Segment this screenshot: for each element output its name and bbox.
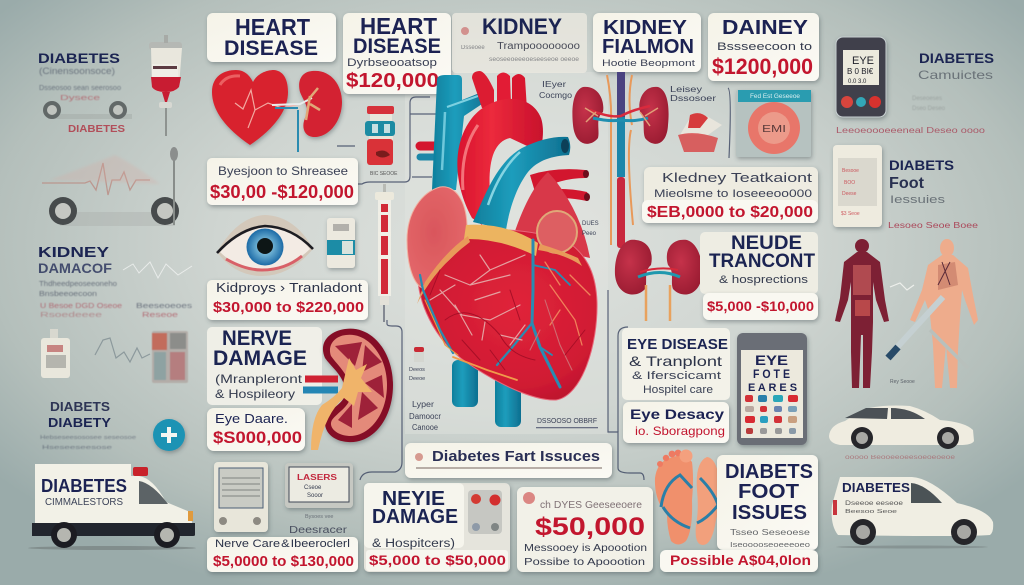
panel: kidney faded: KIDNEY: [482, 14, 562, 39]
icon: white sedan: [829, 406, 974, 449]
caption: liver lower: Damoocr: [409, 412, 441, 421]
caption: liver center top: IEyer: [542, 80, 566, 89]
panel: kidney failure: FIALMON: [602, 36, 694, 58]
sclera: [220, 226, 310, 270]
left: kidney damage block: DAMACOF: [38, 260, 112, 276]
ecg line: [42, 163, 150, 195]
superior vena cava: [432, 75, 489, 190]
panel: neude transcont: [700, 232, 818, 294]
panel: kidney transplant cost: $30,000 to $220,000: [213, 299, 364, 316]
right: diabets foot block: [888, 157, 979, 230]
icon: phone with report: Besooe: [842, 168, 859, 174]
icon: white van: Beesoo Seoe: [845, 509, 897, 515]
eyelid: [217, 215, 313, 276]
caption: small vial: [409, 367, 425, 382]
caption lines: Dysece: [60, 95, 100, 102]
panel: diabets foot issues: DIABETS: [725, 461, 813, 483]
app buttons: [745, 395, 798, 434]
ambulance light: [133, 467, 148, 476]
icon: white van: DIABETES: [842, 480, 910, 495]
icon: ghost car 1: [43, 101, 132, 119]
panel: kidney treatment: [642, 167, 818, 223]
ambulance text: DIABETES: [41, 476, 127, 496]
caption: below devices: [289, 514, 348, 536]
subtitle: complications: (Cinensoonsoce): [39, 66, 115, 76]
caption: figures: [890, 283, 915, 385]
icon: gadget with pink disc: Fed Est Geseeoe: [750, 94, 801, 100]
panel: kidney failure: Hootie Beopmont: [602, 58, 695, 69]
icon: eye: [217, 215, 313, 276]
panel: nerve damage: NERVE: [222, 327, 292, 350]
connector lines: [337, 88, 730, 480]
pupil: [257, 238, 273, 254]
right: diabets foot block: Foot: [889, 175, 925, 192]
panel: amputation cost: Messooey is Apoootion: [524, 543, 647, 554]
crack and vessels: [235, 90, 300, 128]
panel: light area behind heart: [405, 72, 608, 434]
right strap: [697, 478, 718, 523]
panel: amputation cost: $50,000: [535, 513, 645, 541]
caption: liver center top: [539, 80, 573, 100]
panel: heart disease title: DISEASE: [224, 37, 318, 60]
panel: nerve care cost: [207, 537, 358, 572]
caption: Hseseeseesose: [42, 445, 112, 451]
panel: kidney faded: seoseeoeeeoeseeseoe oeeoe: [489, 57, 580, 63]
ambulance body: [35, 464, 193, 534]
panel: eye disease card: & Tranplont: [629, 353, 722, 369]
ghost dashes: [912, 96, 946, 112]
icon: kidney cross-section: [303, 329, 393, 450]
kidney left: [572, 87, 603, 144]
panel: eye desacy pill: [623, 402, 729, 443]
panel: diabetes foot issues banner: Diabetes Fart Issuces: [432, 448, 600, 465]
probe: [173, 150, 175, 225]
artery and vein: [305, 376, 338, 382]
left strap: [661, 475, 692, 528]
panel: neyie damage: NEYIE: [382, 488, 445, 510]
left: diabets block: DIABETY: [48, 415, 111, 430]
panel: neyie damage: DAMAGE: [372, 506, 458, 528]
car wheels: [60, 212, 175, 226]
yellow fat band: [464, 225, 538, 256]
panel: diabets foot issues: FOOT: [738, 481, 799, 503]
icon: kidney pieces: [678, 113, 722, 152]
heading: kidney damage: KIDNEY: [38, 244, 109, 261]
icon: phone eye chart: [737, 333, 807, 445]
caption: liver lower: [409, 400, 441, 432]
panel: neude cost pill: $5,000 -$10,000: [707, 298, 814, 314]
panel: eye disease cost: Byesjoon to Shreasee: [218, 164, 348, 178]
panel: amputation cost: Possibe to Apoootion: [524, 557, 645, 568]
caption: small right: [582, 221, 599, 237]
main heart body: [418, 230, 597, 400]
icon: phone eye chart: E A R E S: [748, 382, 797, 394]
icon: gadget with pink disc: [736, 90, 811, 157]
icon: ambulance: [28, 464, 196, 550]
heading: DIABETS: [889, 157, 954, 173]
panel: dainey cost: [708, 13, 819, 81]
icon: lower kidneys: [615, 240, 702, 321]
panel: nerve damage: DAMAGE: [213, 347, 307, 370]
rule under caption: [536, 427, 598, 428]
medulla pyramids: [335, 342, 384, 428]
left foot: [655, 456, 693, 544]
ambulance window: [139, 481, 168, 504]
lashes: [217, 226, 313, 253]
panel: eye disease pill: Eye Daare.: [215, 411, 288, 426]
panel: eye desacy pill: io. Sboragpong: [635, 424, 725, 438]
left: diabets block: [40, 399, 136, 451]
panel: heart disease title: [207, 13, 336, 62]
iris: [246, 228, 284, 266]
panel: eye disease card: Hospitel care: [643, 384, 713, 396]
panel: eye disease card: [622, 328, 730, 400]
panel: eye disease cost: $30,00 -$120,000: [210, 182, 354, 202]
caption lines: Dsseosoo sean seerosoo: [39, 85, 121, 92]
panel: kidney faded: Dsseoee: [461, 45, 485, 51]
caption: liver center top: Cocmgo: [539, 91, 573, 100]
panel: diabets foot issues: Tsseo Seseoese: [730, 528, 811, 537]
right upper heart back: [512, 172, 590, 258]
red caption: Lesoeo Seoe Boee: [888, 221, 979, 230]
panel: neyie damage: $5,000 to $50,000: [369, 552, 506, 568]
icon: orange body figure: [910, 239, 978, 388]
panel: heart disease cost: $120,000: [346, 70, 439, 92]
panel: heart disease cost: Dyrbseooatsop: [347, 57, 437, 69]
icon: injection pen: [888, 297, 968, 368]
highlight: [220, 76, 240, 85]
ambulance stripe: [32, 523, 195, 536]
panel: dainey cost: Bssseecoon to: [717, 41, 812, 53]
panel: kidney transplant cost: [207, 280, 368, 320]
ambulance wheels: [51, 522, 77, 548]
caption: leader text: Leisey: [670, 85, 702, 94]
icon: monitor device: [214, 462, 268, 532]
kidney shape: [299, 71, 342, 137]
icon: glucose meter: 0.0 3.0: [848, 79, 867, 85]
caption: sedan: ooooo Beooeeoeesoeoeoeoe: [845, 455, 956, 461]
red caption: Leeoeoooeeeneal Deseo oooo: [836, 126, 986, 135]
caption: Reseoe: [142, 312, 178, 319]
icon: red anatomy figure: [835, 239, 889, 388]
panel: diabets foot issues: [717, 455, 818, 550]
left atrium pink: [407, 187, 467, 288]
icon: small vial: [414, 347, 424, 362]
panel: eye disease card: EYE DISEASE: [627, 336, 728, 353]
panel: kidney failure: [593, 13, 701, 72]
captions around heart: [409, 80, 599, 432]
pulmonary artery: [473, 137, 570, 230]
panel: kidney faded: Trampoooooooo: [497, 41, 580, 52]
bottle caption: BIC SEOOE: [370, 171, 398, 177]
renal pelvis and ureter: [311, 358, 372, 450]
icon: phone with report: BOO: [844, 180, 855, 186]
panel: nerve care cost: $5,0000 to $130,000: [213, 553, 354, 570]
caption: Rsoedeeee: [40, 312, 102, 319]
icon: white van: Dseeoe eeseoe: [845, 501, 904, 507]
panel: eye desacy pill: Eye Desacy: [630, 406, 724, 422]
icon: glucose meter: [836, 37, 886, 117]
caption: small vial: Deeoe: [409, 376, 425, 382]
right: diabetes text block: [836, 50, 994, 135]
panel: dainey cost: $1200,000: [712, 54, 813, 79]
panel: kidney treatment: $EB,0000 to $20,000: [647, 204, 813, 221]
caption: Thdheedpeoseeoneho: [39, 281, 117, 288]
icon: laser device: [285, 463, 353, 508]
caption: figures: Rey Seooe: [890, 379, 915, 385]
panel: neude transcont: NEUDE: [731, 233, 802, 254]
ambulance shadow: [28, 546, 196, 550]
caption: leader text: Dssosoer: [670, 94, 716, 103]
icon: phone with report: Deese: [842, 191, 857, 197]
icon: medical plus badge: [153, 419, 185, 451]
icon: phone with report: [833, 145, 882, 227]
heading: diabetes: DIABETES: [38, 50, 120, 66]
blue lower stumps: [452, 360, 478, 407]
outer kidney: [323, 329, 393, 442]
panel: amputation cost: ch DYES Geeseeoere: [540, 500, 642, 511]
renal vessels: [593, 118, 648, 121]
chart: faded ECG with car: [42, 147, 179, 226]
ghost dashes: Deseoeses: [912, 96, 942, 102]
caption: liver lower: Lyper: [412, 400, 434, 409]
panel: neyie damage: & Hospitcers): [372, 538, 455, 550]
icon: feet: [655, 450, 720, 545]
panel: kidney treatment: Kledney Teatkaiont: [662, 170, 813, 185]
caption: liver lower: Canooe: [412, 423, 439, 432]
right red vessels: [530, 169, 588, 192]
panel: possible amputation pill: [660, 550, 818, 572]
panel: dainey cost: DAINEY: [722, 17, 809, 39]
caption: small right: DUES: [582, 221, 599, 227]
ghost dashes: Dseo Deseo: [912, 106, 946, 112]
panel: eye disease pill: [207, 408, 305, 451]
caption: [40, 435, 136, 451]
panel: nerve damage: [207, 327, 322, 405]
icon: laser device: Cseoe: [304, 485, 322, 491]
caption: below devices: Deesracer: [289, 525, 348, 536]
caption: U Besoe DGD Oseoe: [40, 303, 122, 310]
panel: diabets foot issues: ISSUES: [732, 502, 807, 524]
right foot: [696, 457, 720, 545]
panel: heart disease cost: [343, 13, 451, 94]
panel: eye disease card: & Iferscicamt: [632, 370, 721, 382]
icon: phone eye chart: EYE: [755, 352, 788, 368]
subtitle: complications: Camuictes: [918, 68, 993, 82]
panel: eye disease cost: [207, 158, 358, 205]
icon: glucose meter: B 0 BI€: [847, 67, 874, 76]
icon: laser device: LASERS: [297, 473, 338, 482]
panel: nerve damage: & Hospileory: [215, 387, 295, 401]
panel: eye disease pill: $S000,000: [213, 428, 302, 447]
red label: diabetes: DIABETES: [68, 124, 125, 135]
caption: leader text: [670, 85, 716, 103]
panel: amputation cost: [517, 487, 653, 572]
caption: Beeseoeoes: [136, 303, 193, 310]
aorta stubs: [472, 71, 494, 108]
icon: phone with report: $3 Seoe: [841, 211, 860, 217]
panel: neude cost pill: [703, 293, 818, 320]
icon: ambulance: CIMMALESTORS: [45, 497, 123, 508]
icon: central vessel with upper kidneys: [572, 72, 669, 248]
ecg small: [123, 262, 192, 278]
inner cortex: [330, 335, 387, 436]
panel: kidney failure: KIDNEY: [603, 17, 688, 39]
panel: neude transcont: & hosprections: [719, 274, 809, 286]
caption: below devices: Bysoes vee: [305, 514, 333, 520]
icon: phone eye chart: F O T E: [753, 367, 790, 381]
left column: diabetes text: [38, 50, 125, 135]
panel: kidney treatment: Mieolsme to Ioseeeoo000: [654, 188, 812, 200]
heading: diabets: DIABETS: [50, 399, 110, 414]
icon: ghost equipment: [152, 331, 188, 383]
panel: heart disease cost: HEART: [360, 13, 437, 39]
right pink oval: [537, 211, 577, 253]
icon: syringe: [375, 184, 394, 322]
icon: white van: [832, 477, 993, 548]
panel: diabets foot issues: Iseooooseoeeeoeo: [730, 542, 810, 549]
panel: heart disease cost: DISEASE: [353, 35, 441, 58]
icon: pill bottle: [365, 106, 398, 177]
kidney right: [639, 87, 669, 144]
caption: small right: Peeo: [582, 231, 597, 237]
panel: diabetes foot issues banner: [405, 443, 612, 478]
buttons cluster: [468, 490, 502, 534]
left: kidney damage block: [38, 244, 193, 319]
caption: small vial: Deeos: [409, 367, 425, 373]
caption lines: [39, 85, 121, 102]
caption: [39, 281, 193, 319]
icon: small bottle: [327, 218, 355, 268]
icon: heart anatomy: [407, 71, 597, 427]
icon: broken heart with kidney: [212, 70, 342, 152]
panel: kidney faded: [452, 13, 587, 73]
panel: possible amputation pill: Possible A$04,0lon: [670, 552, 811, 568]
panel: kidney transplant cost: Kidproys › Tranladont: [216, 280, 362, 295]
central vessels: [617, 72, 625, 117]
panel: neyie damage: [364, 483, 510, 572]
caption: Hebseseesososee seseosoe: [40, 435, 136, 441]
heart shape: [212, 70, 288, 145]
icon: laser device: Sooor: [307, 493, 323, 499]
icon: glucose meter: EYE: [852, 55, 874, 67]
icon: IV bag: [149, 35, 182, 136]
aorta arch: [457, 99, 543, 225]
caption: Bnsbeeoecoon: [39, 291, 97, 298]
chart: ghost ecg: [95, 338, 150, 362]
heading: diabetes: DIABETES: [919, 50, 994, 66]
subtitle: Iessuies: [890, 194, 946, 206]
panel: neude transcont: TRANCONT: [709, 251, 815, 272]
panel: nerve damage: (Mranpleront: [215, 372, 303, 386]
caption: lower right: DSSOOSO OBBRF: [537, 418, 597, 425]
left small vessels: [420, 142, 438, 150]
icon: gadget with pink disc: EMI: [762, 124, 786, 135]
panel: nerve care cost: Nerve Care & Ibeeroclerl: [215, 538, 350, 550]
veins: [420, 240, 590, 387]
icon: medicine box left: [41, 329, 70, 378]
panel: heart disease title: HEART: [235, 14, 310, 40]
ecg pale fill: [50, 155, 160, 184]
